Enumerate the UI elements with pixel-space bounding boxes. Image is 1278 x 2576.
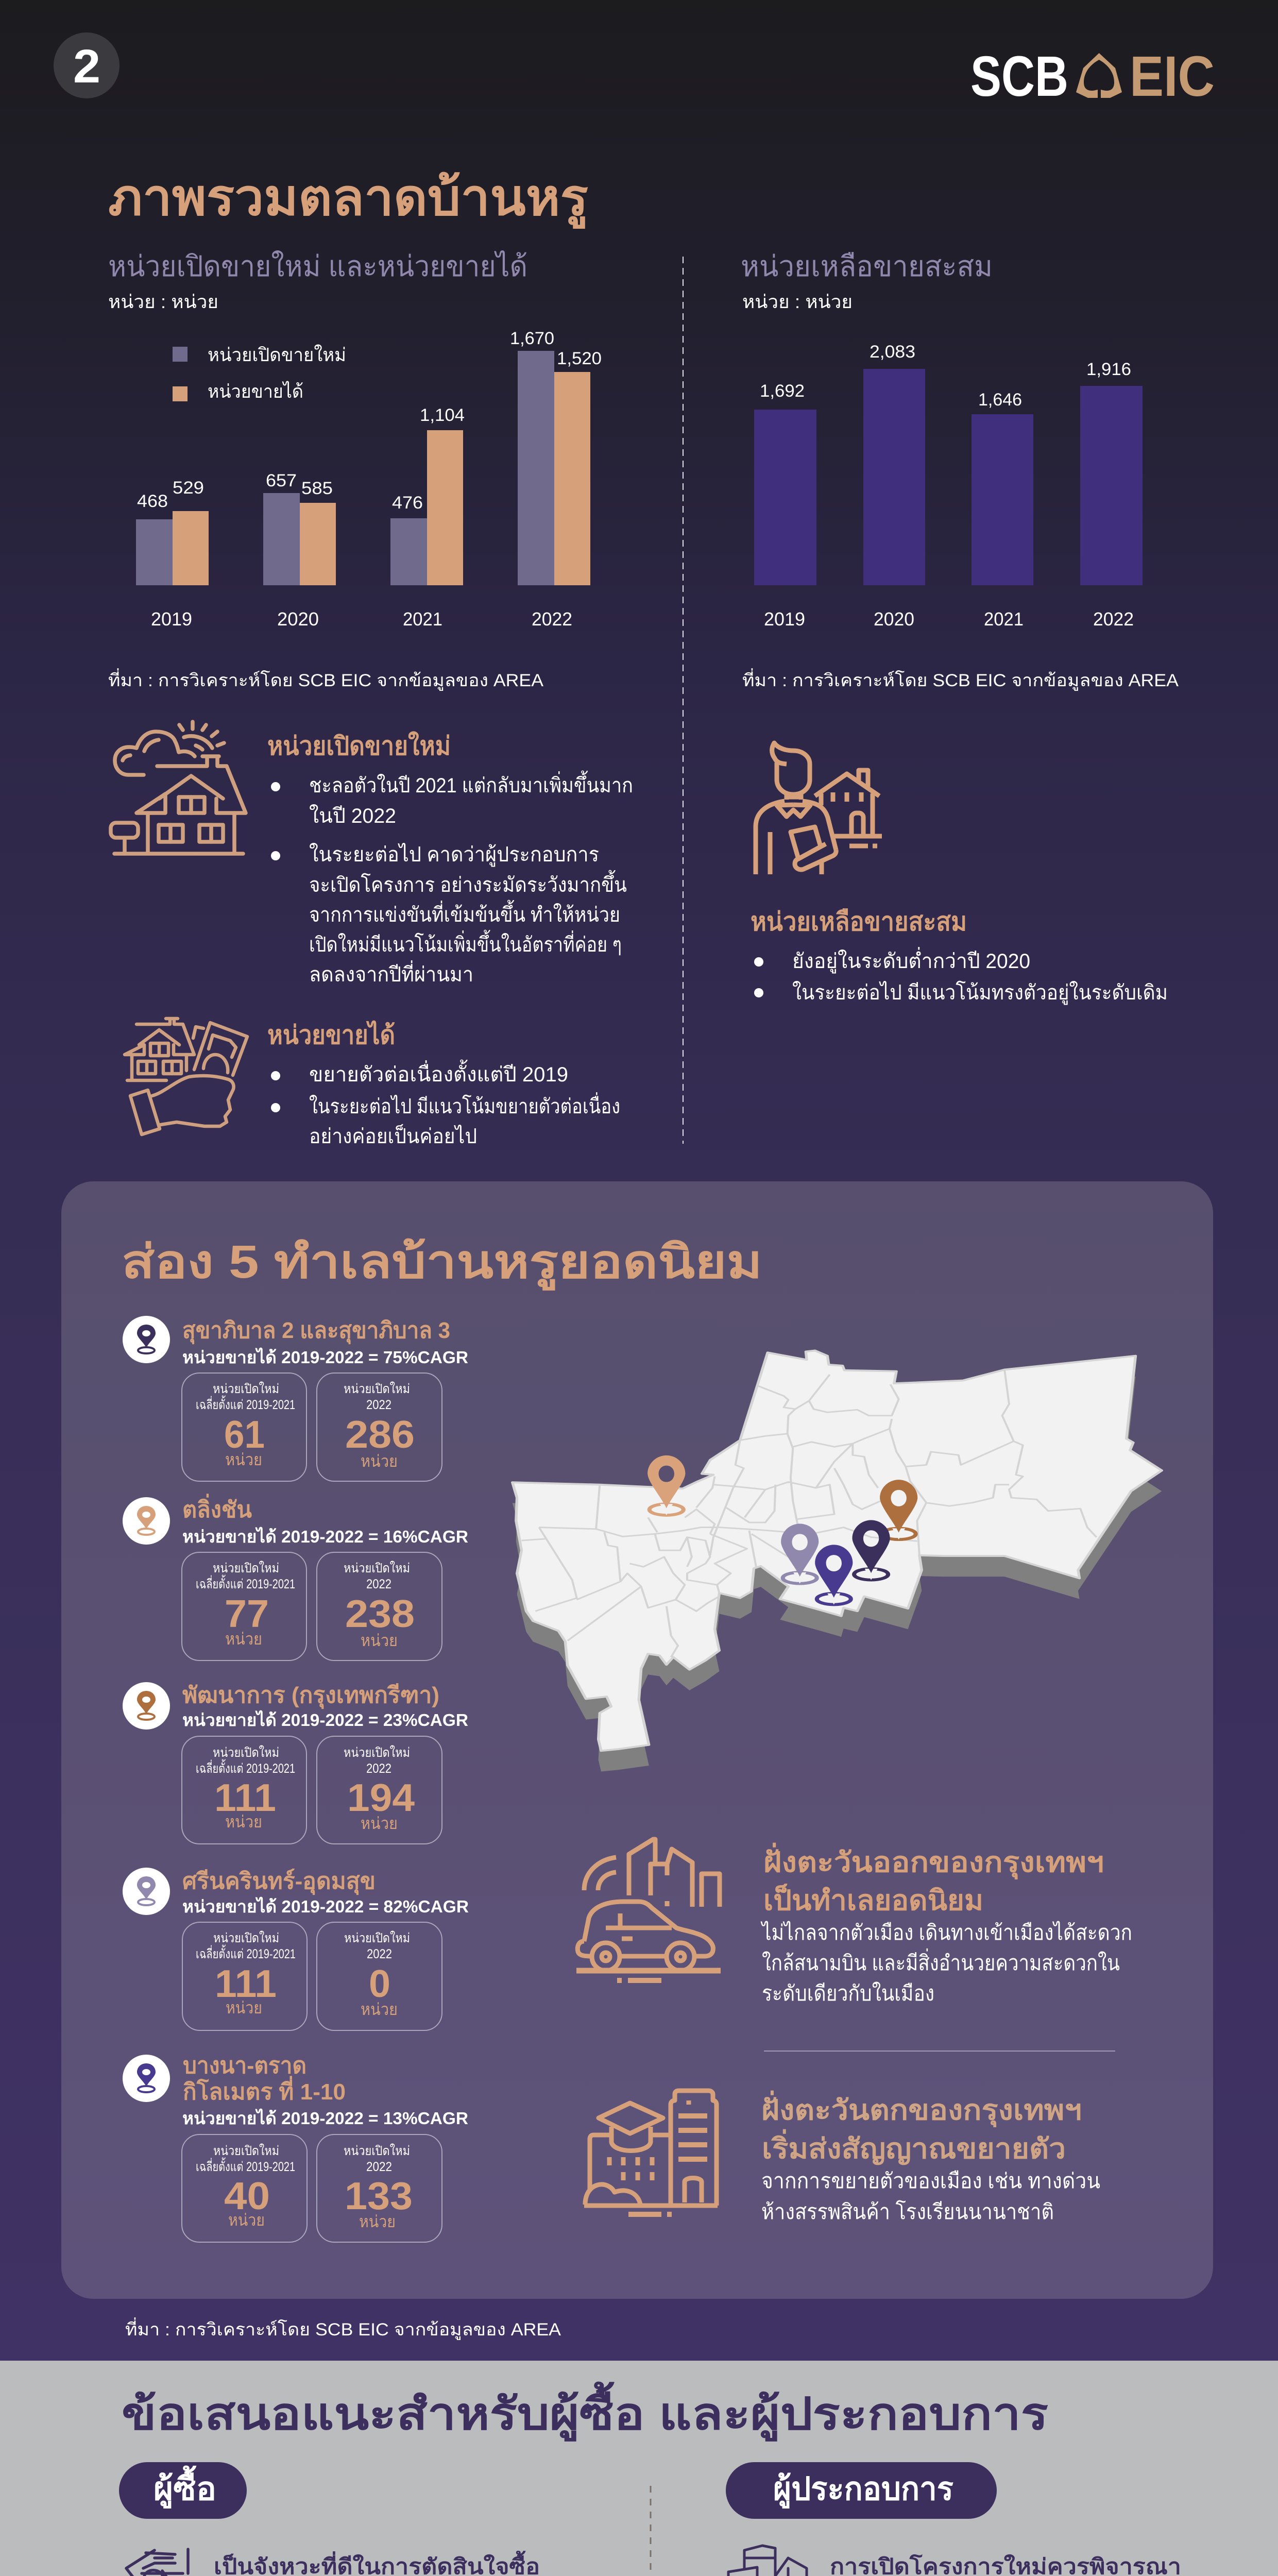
name: ตลิ่งชัน: [182, 1494, 252, 1522]
bullet text: ชะลอตัวในปี 2021 แต่กลับมาเพิ่มขึ้นมาก: [309, 770, 633, 797]
body: ไม่ไกลจากตัวเมือง เดินทางเข้าเมืองได้สะดวก: [760, 1921, 1132, 1944]
legend: [173, 344, 346, 402]
bullet text: จากการแข่งขันที่เข้มข้นขึ้น ทำให้หน่วย: [309, 900, 620, 926]
text: sold units: [267, 1020, 620, 1148]
left subheading: หน่วยเปิดขายใหม่ และหน่วยขายได้: [108, 250, 527, 282]
stat box left: 77: [225, 1592, 269, 1635]
developer item 1: [728, 2546, 1197, 2576]
stat box right: หน่วย: [361, 1814, 398, 1833]
bullet text: [309, 770, 633, 986]
vertical divider: [683, 257, 684, 1144]
value labels: 1,916: [1086, 360, 1131, 379]
panel: recommendations: [0, 2361, 1278, 2576]
pin: Taling Chan: [647, 1455, 685, 1515]
year axis: 2019: [764, 608, 805, 630]
bullets: [271, 782, 280, 860]
year axis: 2021: [403, 608, 442, 630]
icon: house and money in hand: [125, 1019, 247, 1134]
body: ใกล้สนามบิน และมีสิ่งอำนวยความสะดวกใน: [762, 1948, 1120, 1975]
stat box right: [317, 1552, 442, 1660]
stat box left: เฉลี่ยตั้งแต่ 2019-2021: [196, 1574, 295, 1591]
bullets: [754, 957, 763, 997]
stat box right: 194: [347, 1776, 415, 1819]
stat box left: 111: [214, 1776, 276, 1819]
name: สุขาภิบาล 2 และสุขาภิบาล 3: [182, 1318, 450, 1345]
body: [761, 2169, 1100, 2224]
logo: SCB EIC: SCB: [970, 45, 1068, 108]
year axis: 2019: [151, 608, 192, 630]
stat box left: 111: [215, 1962, 277, 2005]
value labels: [760, 342, 1131, 410]
name: บางนา-ตราด: [183, 2053, 306, 2078]
CAGR: หน่วยขายได้ 2019-2022 = 23%CAGR: [182, 1710, 468, 1730]
left unit label: หน่วย : หน่วย: [108, 291, 218, 312]
year axis: 2020: [277, 608, 319, 630]
name: [183, 2053, 346, 2105]
year axis: 2022: [532, 608, 572, 630]
name: ศรีนครินทร์-อุดมสุข: [182, 1868, 376, 1895]
stat box left: เฉลี่ยตั้งแต่ 2019-2021: [196, 1944, 296, 1961]
body: [760, 1921, 1132, 2005]
CAGR: หน่วยขายได้ 2019-2022 = 75%CAGR: [182, 1347, 468, 1367]
stat box right: [317, 1373, 442, 1481]
icon: hands and coin: [122, 2549, 191, 2576]
value labels: 585: [301, 479, 333, 498]
bullet text: จะเปิดโครงการ อย่างระมัดระวังมากขึ้น: [309, 870, 627, 896]
pin badge: [123, 1682, 170, 1730]
page number badge: [54, 32, 120, 98]
bullet text: [309, 1059, 620, 1148]
logo: SCB EIC: [970, 45, 1215, 108]
stat box left: เฉลี่ยตั้งแต่ 2019-2021: [196, 2157, 295, 2174]
left source: ที่มา : การวิเคราะห์โดย SCB EIC จากข้อมูลของ AREA: [108, 668, 543, 691]
CAGR: หน่วยขายได้ 2019-2022 = 16%CAGR: [182, 1527, 468, 1546]
stat box left: หน่วย: [228, 2211, 265, 2229]
stat box right: [317, 2134, 442, 2242]
stat box left: หน่วย: [226, 1998, 262, 2017]
pill: developers: ผู้ประกอบการ: [773, 2471, 953, 2509]
stat box right: 0: [369, 1962, 390, 2005]
stat box left: หน่วย: [225, 1812, 262, 1831]
bullet text: ในระยะต่อไป มีแนวโน้มทรงตัวอยู่ในระดับเดิม: [792, 980, 1168, 1005]
name: พัฒนาการ (กรุงเทพกรีฑา): [182, 1683, 439, 1709]
heading: ฝั่งตะวันตกของกรุงเทพฯ: [761, 2090, 1082, 2128]
year axis: 2022: [1093, 608, 1134, 630]
heading: [761, 2090, 1082, 2165]
stat box right: 2022: [366, 1577, 391, 1591]
right source: ที่มา : การวิเคราะห์โดย SCB EIC จากข้อมูลของ AREA: [742, 668, 1179, 691]
bars: [136, 351, 590, 585]
body: จากการขยายตัวของเมือง เช่น ทางด่วน: [761, 2169, 1100, 2193]
year axis: [151, 608, 572, 630]
location 1: [123, 1316, 468, 1481]
chart: accumulated unsold units: [754, 342, 1143, 630]
stat box right: 238: [345, 1592, 415, 1635]
value labels: 468: [137, 492, 168, 511]
stat box right: หน่วย: [361, 2000, 398, 2019]
panel: top 5 luxury house locations: [61, 1181, 1213, 2299]
value labels: 657: [266, 471, 297, 490]
map of Bangkok: [513, 1350, 1162, 1771]
value labels: 529: [173, 478, 204, 498]
location 5: [123, 2053, 468, 2242]
heading: [763, 1842, 1104, 1916]
legend: หน่วยขายได้: [208, 381, 303, 402]
stat box right: 2022: [366, 1761, 391, 1776]
right unit label: หน่วย : หน่วย: [742, 291, 853, 312]
year axis: [764, 608, 1134, 630]
buyer item 1: [122, 2549, 566, 2576]
heading: หน่วยขายได้: [267, 1020, 395, 1049]
bullet text: ในปี 2022: [309, 804, 396, 827]
icon: salesperson with house: [756, 743, 882, 874]
stat box left: หน่วยเปิดใหม่: [213, 1930, 279, 1945]
stat box right: 2022: [367, 1947, 392, 1961]
text: east side: [760, 1842, 1132, 2005]
pin: Srinakarin: [781, 1524, 819, 1584]
heading: ฝั่งตะวันออกของกรุงเทพฯ: [763, 1842, 1104, 1880]
stat box right: หน่วยเปิดใหม่: [344, 1930, 410, 1945]
stat box right: 2022: [366, 1398, 391, 1412]
stat box left: เฉลี่ยตั้งแต่ 2019-2021: [196, 1395, 295, 1412]
stat box left: หน่วย: [225, 1450, 262, 1469]
value labels: 476: [392, 493, 423, 513]
right subheading: หน่วยเหลือขายสะสม: [741, 250, 993, 282]
location 4: [123, 1868, 469, 2030]
stat box left: หน่วยเปิดใหม่: [213, 2143, 279, 2158]
pin badge: [123, 1316, 170, 1363]
panel source: ที่มา : การวิเคราะห์โดย SCB EIC จากข้อมูลของ AREA: [125, 2317, 561, 2340]
body: ระดับเดียวกับในเมือง: [762, 1981, 934, 2005]
stat box left: [182, 1373, 306, 1481]
location 2: [123, 1494, 468, 1660]
stat box left: 61: [224, 1413, 265, 1456]
pin badge: [123, 1868, 170, 1915]
legend: หน่วยเปิดขายใหม่: [208, 344, 346, 365]
bars: [754, 369, 1143, 585]
stat box right: หน่วย: [359, 2212, 396, 2231]
value labels: [137, 329, 602, 513]
bullet text: [792, 947, 1168, 1005]
icon: school and tower: [584, 2091, 718, 2214]
bullet text: ขยายตัวต่อเนื่องตั้งแต่ปี 2019: [309, 1059, 568, 1086]
value labels: 2,083: [870, 342, 915, 362]
stat box right: หน่วย: [361, 1631, 398, 1650]
stat box right: หน่วยเปิดใหม่: [344, 1561, 410, 1575]
CAGR: หน่วยขายได้ 2019-2022 = 13%CAGR: [182, 2108, 468, 2128]
bullet text: ในระยะต่อไป คาดว่าผู้ประกอบการ: [309, 842, 599, 867]
stat box left: หน่วย: [225, 1630, 262, 1648]
stat box left: เฉลี่ยตั้งแต่ 2019-2021: [196, 1759, 295, 1776]
stat box right: หน่วย: [361, 1452, 398, 1470]
value labels: 1,104: [420, 405, 465, 425]
heading: หน่วยเปิดขายใหม่: [267, 731, 451, 760]
bullet text: ในระยะต่อไป มีแนวโน้มขยายตัวต่อเนื่อง: [309, 1092, 620, 1118]
page number badge: 2: [73, 40, 100, 93]
title: ภาพรวมตลาดบ้านหรู: [108, 169, 588, 229]
panel title: ส่อง 5 ทำเลบ้านหรูยอดนิยม: [122, 1236, 762, 1291]
stat box left: หน่วยเปิดใหม่: [213, 1561, 279, 1575]
stat box right: หน่วยเปิดใหม่: [344, 2143, 410, 2158]
stat box left: [182, 1736, 306, 1844]
value labels: 1,692: [760, 381, 805, 401]
stat box right: หน่วยเปิดใหม่: [344, 1381, 410, 1396]
pin: Sukhapiban: [852, 1520, 890, 1580]
stat box left: [182, 1552, 306, 1660]
stat box right: 133: [345, 2174, 413, 2217]
text: unsold units: [751, 907, 1168, 1005]
stat box right: 2022: [366, 2160, 392, 2174]
stat box left: [182, 2134, 307, 2242]
stat box right: หน่วยเปิดใหม่: [344, 1745, 410, 1760]
icon: office buildings: [728, 2546, 807, 2576]
bullets: [271, 1071, 280, 1112]
heading: เป็นทำเลยอดนิยม: [763, 1884, 983, 1916]
text: new launch units: [267, 731, 633, 986]
year axis: 2021: [984, 608, 1024, 630]
bullet text: เปิดใหม่มีแนวโน้มเพิ่มขึ้นในอัตราที่ค่อย ๆ: [309, 929, 622, 956]
pill: developers: [726, 2462, 997, 2519]
logo: SCB EIC: EIC: [1130, 45, 1215, 108]
name: กิโลเมตร ที่ 1-10: [183, 2076, 346, 2105]
pin badge: [123, 2055, 170, 2102]
location 3: [123, 1682, 468, 1844]
stat box left: [182, 1922, 307, 2030]
bullet text: อย่างค่อยเป็นค่อยไป: [309, 1124, 477, 1148]
pin: Bangna-Trad: [815, 1545, 853, 1604]
stat box right: 286: [345, 1413, 415, 1456]
value labels: 1,520: [557, 349, 602, 368]
CAGR: หน่วยขายได้ 2019-2022 = 82%CAGR: [182, 1896, 469, 1916]
bullet text: ลดลงจากปีที่ผ่านมา: [309, 960, 473, 986]
pin badge: [123, 1497, 170, 1545]
icon: house with cloud and sun: [111, 722, 246, 854]
body: ห้างสรรพสินค้า โรงเรียนนานาชาติ: [761, 2200, 1054, 2224]
pill: buyers: ผู้ซื้อ: [154, 2465, 216, 2509]
section title: ข้อเสนอแนะสำหรับผู้ซื้อ และผู้ประกอบการ: [122, 2381, 1048, 2442]
heading: เริ่มส่งสัญญาณขยายตัว: [762, 2129, 1066, 2165]
value labels: 1,670: [510, 329, 554, 348]
stat box left: หน่วยเปิดใหม่: [213, 1745, 279, 1760]
chart: new and sold units: [136, 329, 602, 630]
stat box right: [317, 1736, 442, 1844]
pin: Pattanakarn: [880, 1480, 917, 1539]
year axis: 2020: [874, 608, 914, 630]
text: west side: [761, 2090, 1100, 2224]
value labels: 1,646: [978, 390, 1022, 410]
stat box right: [317, 1922, 442, 2030]
icon: car and city: [576, 1839, 721, 1980]
stat box left: 40: [224, 2174, 270, 2217]
stat box left: หน่วยเปิดใหม่: [213, 1381, 279, 1396]
pill: buyers: [119, 2462, 247, 2519]
heading: หน่วยเหลือขายสะสม: [751, 907, 967, 936]
bullet text: ยังอยู่ในระดับต่ำกว่าปี 2020: [792, 947, 1030, 973]
